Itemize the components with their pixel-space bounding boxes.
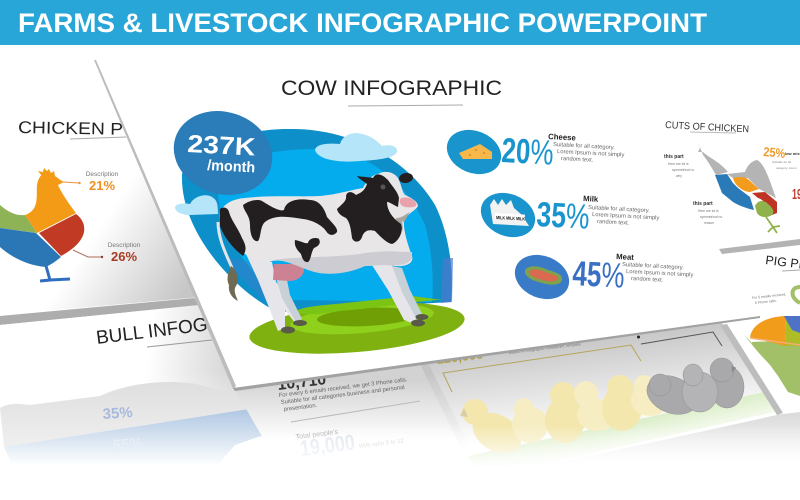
text: meat description: Suitable for all category. <box>622 262 684 271</box>
icon: meat <box>508 247 576 307</box>
text: meat description: Lorem Ipsum is not simply <box>626 269 694 279</box>
text: milk description <box>583 194 660 227</box>
illustration: cow <box>218 172 428 334</box>
illustration: blue background blob <box>182 129 453 312</box>
panel: pig pie slide <box>720 253 800 415</box>
text: milk description: Suitable for all category. <box>588 205 650 214</box>
illustration: cloud left <box>175 195 218 215</box>
text: this part upper: Here are lot is <box>668 162 689 166</box>
callout: 21% <box>63 171 119 193</box>
illustration: grey chicks <box>641 358 744 421</box>
cow nose <box>400 197 416 207</box>
title: cow infographic: COW INFOGRAPHIC <box>281 77 502 100</box>
text: this part upper: symmetrical no <box>672 168 694 172</box>
value: 20%: 20% <box>501 131 555 173</box>
stat: 25%: low mix <box>785 151 800 156</box>
decorative edge <box>94 60 236 389</box>
text: stat description: Suitable for all categories business and personal <box>281 385 405 406</box>
chart: bull silhouette: 65% <box>112 435 143 454</box>
text: pig description <box>752 292 786 305</box>
callout: 26%: 26% <box>111 249 137 264</box>
front legs <box>370 262 418 323</box>
text: this part lower <box>693 201 722 225</box>
text: cheese description <box>548 132 625 164</box>
chart: pig <box>745 316 800 396</box>
text: meat description: random text. <box>631 276 664 284</box>
icon: cheese <box>440 122 508 182</box>
stat: 25%: 25% <box>763 144 786 161</box>
text: pig description: 6 Phone calls. <box>755 299 777 305</box>
cow eye <box>380 184 386 190</box>
text: meat description <box>616 252 694 284</box>
callout: 26% <box>73 242 141 264</box>
text: this part lower: symmetrical no <box>700 215 722 219</box>
panel: chicken pie slide <box>0 50 200 325</box>
chart: chicken cuts <box>698 142 780 233</box>
bracket: yellow <box>443 345 641 392</box>
value: 35%: 35% <box>536 195 591 237</box>
text: cheese description: Lorem Ipsum is not simply <box>557 149 625 159</box>
callout: 26%: Description <box>108 242 141 249</box>
title: farms & livestock: FARMS & LIVESTOCK INFOGRAPHIC POWERPOINT <box>18 8 707 38</box>
text: total people's: Total people's <box>295 429 339 441</box>
text: this part upper: this part <box>664 154 684 160</box>
text: this part lower: Here are lot is <box>698 209 719 213</box>
panel: chicks slide <box>300 323 800 500</box>
text: stat description: For every 6 emails received, we get 3 Phone calls. <box>279 377 408 399</box>
text: cheese description: Suitable for all category. <box>553 142 615 151</box>
bracket: dark <box>641 332 722 346</box>
header banner <box>0 0 800 45</box>
stat: 25% <box>763 144 800 170</box>
value: 45%: 45% <box>572 254 626 296</box>
text: caption: Based on Infographic Powerpoint Template <box>509 342 581 355</box>
panel: cuts of chicken slide <box>664 120 800 254</box>
cow spots <box>220 172 414 262</box>
stat: 25%: Suitable for all <box>772 160 791 164</box>
item: meat <box>508 247 694 307</box>
panel: cow infographic main slide <box>94 60 800 391</box>
chart: chicken pie <box>0 168 84 281</box>
icon: milk: MILK MILK MILK <box>496 215 526 222</box>
cow tail <box>218 222 232 268</box>
text: ratio: With ratio 3 to 12 <box>359 438 405 450</box>
item: cheese <box>440 122 625 182</box>
badge: 237K per month <box>163 99 283 207</box>
text: milk description: random text. <box>597 219 630 227</box>
text: meat description: Meat <box>616 252 635 262</box>
illustration: yellow chicks <box>460 375 669 462</box>
text: cheese description: Cheese <box>548 132 577 142</box>
text: stat description: presentation. <box>284 403 318 413</box>
illustration: cloud right <box>315 133 397 162</box>
heading: chicken pie: CHICKEN P <box>18 118 123 139</box>
text: 120,000: 120,000 <box>436 346 484 367</box>
callout: 21%: 21% <box>89 178 115 193</box>
illustration: grass <box>468 392 775 478</box>
cow body <box>220 172 418 274</box>
text: 10,710 stat: 10,710 <box>276 371 327 394</box>
chart: bull silhouette: 35% <box>102 404 133 423</box>
heading: cuts of chicken: CUTS OF CHICKEN <box>665 120 749 135</box>
text: stat description <box>279 377 408 413</box>
panel: bull infographic slide <box>0 305 300 500</box>
text: this part upper <box>664 154 694 178</box>
illustration: grass <box>247 295 467 361</box>
text: this part lower: reason <box>704 221 714 225</box>
text: pig description: For 5 emails received, <box>752 292 786 300</box>
chart: bull silhouette <box>0 382 277 480</box>
item: milk <box>474 185 660 245</box>
text: this part lower: this part <box>693 201 713 207</box>
heading: bull infographic: BULL INFOG <box>95 314 209 349</box>
panel: statistics slide <box>235 364 465 461</box>
text: this part upper: why <box>676 174 682 178</box>
text: milk description: Milk <box>583 194 599 204</box>
callout: 21%: Description <box>86 171 119 178</box>
text: 19,000 stat: 19,000 <box>299 429 356 461</box>
badge: 237K per month: 237K <box>187 130 256 162</box>
icon: pig tail <box>792 287 800 303</box>
text: cheese description: random text. <box>561 156 594 164</box>
back legs <box>246 254 300 331</box>
stat: 25%: category, lorem <box>776 166 797 170</box>
text: milk description: Lorem Ipsum is not simply <box>592 212 660 222</box>
badge: 237K per month: /month <box>207 157 256 177</box>
icon: milk <box>474 185 542 245</box>
cow udder <box>273 264 304 281</box>
